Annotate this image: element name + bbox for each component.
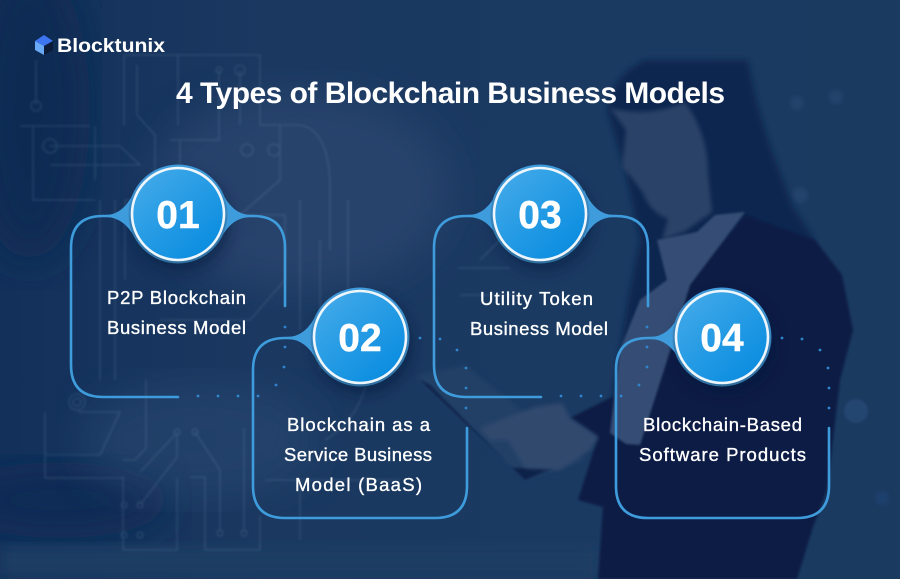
card text: P2P Blockchain xyxy=(107,287,246,308)
number badge: 01 xyxy=(156,194,200,237)
number badge xyxy=(672,288,772,386)
card text: Blockchain as a xyxy=(287,414,431,435)
connector dots xyxy=(781,337,830,409)
circle shadow xyxy=(677,296,775,394)
card text xyxy=(639,414,806,465)
connector dots xyxy=(560,326,648,397)
woman: hair xyxy=(607,60,815,400)
connector dots xyxy=(419,337,467,409)
number badge xyxy=(128,164,228,264)
number badge xyxy=(490,164,590,264)
circle fillet xyxy=(287,313,317,361)
card text: Service Business xyxy=(284,444,432,465)
connector dots xyxy=(197,326,286,397)
panel: 01 P2P Blockchain Business Model xyxy=(71,164,286,397)
circuit board lines xyxy=(20,55,520,550)
woman: shirt collar xyxy=(610,212,745,445)
card text: Software Products xyxy=(639,444,806,465)
number badge: 02 xyxy=(338,317,382,360)
number badge: 03 xyxy=(518,194,562,237)
panel: 03 Utility Token Business Model xyxy=(434,164,648,397)
card text: Model (BaaS) xyxy=(295,474,422,495)
card text: Business Model xyxy=(107,317,246,338)
hand and sleeve xyxy=(480,403,598,470)
circle fillets xyxy=(468,190,614,238)
panel: 02 Blockchain as a Service Business Model xyxy=(253,288,467,518)
circle shadow xyxy=(315,296,413,394)
panel: 04 Blockchain-Based Software Products xyxy=(616,288,830,518)
number badge xyxy=(310,288,410,386)
circle shadow xyxy=(495,173,593,271)
woman: face and neck xyxy=(610,102,712,240)
number badge: 04 xyxy=(700,317,744,360)
woman: jacket xyxy=(570,215,853,579)
card outline xyxy=(253,338,467,518)
card outline xyxy=(71,216,285,397)
card text: Business Model xyxy=(470,318,608,339)
card text: Utility Token xyxy=(480,288,593,309)
title: 4 Types of Blockchain Business Models xyxy=(176,77,725,110)
logo wordmark: Blocktunix xyxy=(57,36,165,57)
card outline xyxy=(434,216,648,397)
icon: blocks cube xyxy=(35,35,53,55)
circle fillets xyxy=(105,190,251,238)
card text xyxy=(284,414,432,495)
logo xyxy=(35,35,165,57)
card text: Blockchain-Based xyxy=(643,414,802,435)
card text xyxy=(470,288,608,339)
tablet xyxy=(415,365,585,480)
card text xyxy=(107,287,246,338)
woman with tablet xyxy=(415,60,853,579)
card outline xyxy=(616,338,829,518)
circle fillet xyxy=(650,313,680,361)
circle shadow xyxy=(133,173,231,271)
